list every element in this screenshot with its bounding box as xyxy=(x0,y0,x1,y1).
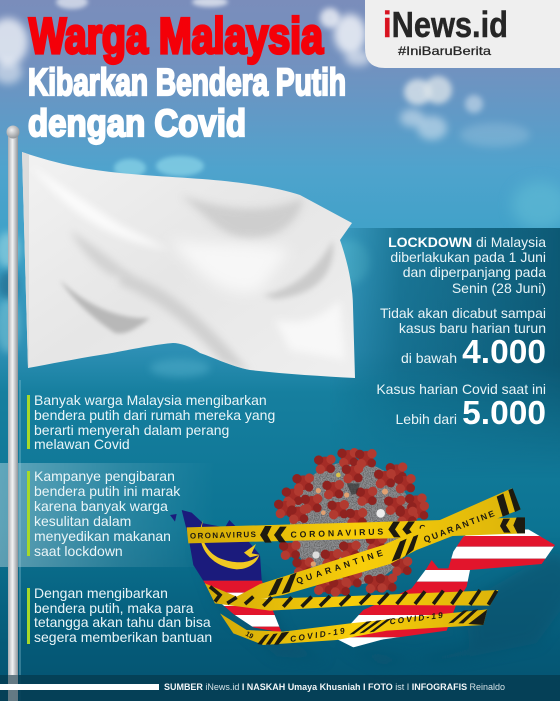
point 1: bendera putih dari rumah mereka yang xyxy=(34,407,275,423)
threshold 4.000: kasus baru harian turun xyxy=(399,320,546,336)
point 3: bendera putih, maka para xyxy=(34,600,194,616)
daily cases 5.000: 5.000 xyxy=(462,395,546,432)
coronavirus tape xyxy=(187,517,525,543)
crescent and star xyxy=(200,520,259,569)
covid-19 tape: 19 xyxy=(244,631,254,641)
white flag xyxy=(22,150,355,378)
coronavirus tape: CORONAVIRUS xyxy=(290,526,384,540)
map shadow xyxy=(197,547,560,667)
point 1: melawan Covid xyxy=(34,436,130,452)
daily cases 5.000: Lebih dari xyxy=(396,411,457,427)
point 2: bendera putih ini marak xyxy=(34,483,181,499)
lockdown dates: diberlakukan pada 1 Juni xyxy=(390,249,546,265)
quarantine tape: QUARANTINE xyxy=(422,508,496,545)
threshold 4.000: 4.000 xyxy=(462,334,546,371)
point 3: tetangga akan tahu dan bisa xyxy=(34,614,211,630)
flagpole xyxy=(6,126,20,701)
point 2 xyxy=(27,468,181,559)
malaysia map and tapes illustration xyxy=(170,448,560,667)
point 3 xyxy=(27,585,212,645)
coronavirus tape: COR xyxy=(419,522,445,533)
threshold 4.000 xyxy=(380,305,546,371)
point 1 xyxy=(27,392,275,452)
logo panel xyxy=(365,0,560,68)
point 1: Banyak warga Malaysia mengibarkan xyxy=(34,392,267,408)
point 2: Kampanye pengibaran xyxy=(34,468,175,484)
peninsular malaysia flag map xyxy=(170,507,287,635)
lockdown dates: LOCKDOWN di Malaysia xyxy=(388,234,546,250)
right text backdrop xyxy=(340,228,560,456)
covid-19 tape xyxy=(220,609,487,645)
title xyxy=(28,8,346,145)
credits: SUMBER iNews.id I NASKAH Umaya Khusniah I FOTO ist I INFOGRAFIS Reinaldo xyxy=(164,682,505,692)
point 3: segera memberikan bantuan xyxy=(34,629,212,645)
covid-19 tape: COVID-19 xyxy=(289,625,346,644)
lockdown dates: dan diperpanjang pada xyxy=(403,264,546,280)
chevron tape xyxy=(205,583,498,611)
threshold 4.000: di bawah xyxy=(401,350,457,366)
point 2: kesulitan dalam xyxy=(34,513,131,529)
lockdown dates xyxy=(388,234,546,296)
point 2: saat lockdown xyxy=(34,543,123,559)
lighter band behind second point xyxy=(0,463,215,567)
logo wordmark: iNews.id xyxy=(383,4,508,45)
title line 3: dengan Covid xyxy=(28,103,246,145)
threshold 4.000: Tidak akan dicabut sampai xyxy=(380,305,546,321)
coronavirus xyxy=(274,448,429,597)
covid-19 tape: COVID-19 xyxy=(389,610,444,626)
point 2: karena banyak warga xyxy=(34,498,168,514)
point 1: berarti menyerah dalam perang xyxy=(34,422,229,438)
title line 1: Warga Malaysia xyxy=(29,8,324,64)
point 3: Dengan mengibarkan xyxy=(34,585,168,601)
east malaysia flag map xyxy=(330,527,560,651)
coronavirus tape: ORONAVIRUS xyxy=(190,530,257,541)
lockdown dates: Senin (28 Juni) xyxy=(452,280,546,296)
daily cases 5.000: Kasus harian Covid saat ini xyxy=(376,381,546,397)
hashtag: #IniBaruBerita xyxy=(398,44,491,58)
quarantine tape: QUARANTINE xyxy=(295,548,384,586)
title line 2: Kibarkan Bendera Putih xyxy=(28,62,346,104)
lockdown text block xyxy=(376,234,546,432)
footer credit bar xyxy=(0,675,560,701)
daily cases 5.000 xyxy=(376,381,546,432)
clouds xyxy=(0,0,560,377)
quarantine tape xyxy=(205,488,521,603)
point 2: menyedikan makanan xyxy=(34,528,171,544)
